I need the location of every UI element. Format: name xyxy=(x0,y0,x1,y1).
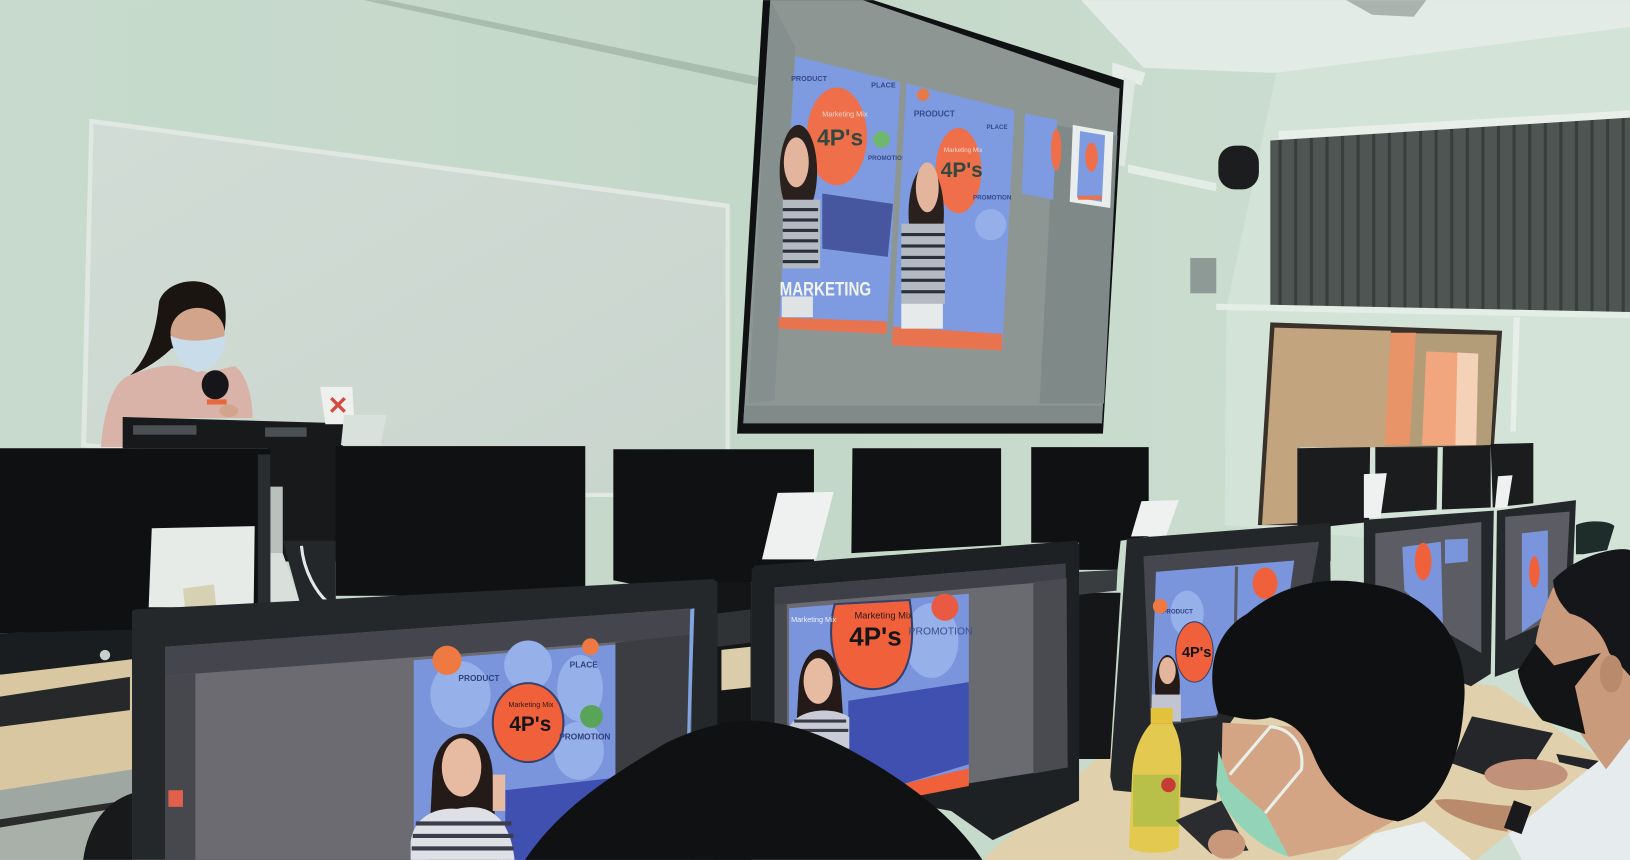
wall pole xyxy=(1510,317,1520,432)
student shirt xyxy=(1337,821,1472,860)
keyboard behind monitor xyxy=(1079,570,1118,595)
upper wall rail xyxy=(364,0,759,85)
projected poster one: PLACE xyxy=(871,80,896,89)
shirt xyxy=(1508,728,1630,860)
dark chair back xyxy=(1576,521,1614,554)
back row monitor three xyxy=(613,449,814,608)
back row monitor five xyxy=(1031,447,1149,570)
computer stand and cables xyxy=(268,487,336,601)
right wall panel xyxy=(1225,27,1630,562)
paper note three xyxy=(762,492,834,559)
back row monitor four xyxy=(851,448,1001,553)
second right monitor xyxy=(1364,511,1494,686)
artboard: PLACE xyxy=(570,660,598,670)
tool strip xyxy=(165,674,195,860)
projected poster one xyxy=(779,56,907,334)
projected poster two xyxy=(892,83,1015,350)
screen housing xyxy=(1112,63,1146,85)
woman in poster one xyxy=(780,125,820,317)
woman in poster two xyxy=(901,162,945,329)
projected poster one: MARKETING xyxy=(780,278,871,300)
left keyboard xyxy=(0,677,130,727)
arm xyxy=(1435,799,1513,832)
blouse xyxy=(101,366,253,447)
paper note on monitor xyxy=(149,526,255,607)
lower wall rail xyxy=(1128,164,1216,191)
dark gap between monitors xyxy=(1079,593,1121,759)
desk sign with red cross xyxy=(320,387,354,424)
whiteboard xyxy=(81,119,730,497)
artboard: PROMOTION xyxy=(559,731,610,741)
middle desk strip xyxy=(721,647,751,690)
artboard xyxy=(789,594,973,796)
projected poster one: 4P's xyxy=(817,125,863,151)
student neck and face xyxy=(1221,723,1393,857)
woman on artboard xyxy=(411,734,515,860)
microphone xyxy=(202,370,238,417)
wall speaker xyxy=(1218,146,1259,189)
far right monitors xyxy=(1297,443,1533,562)
front monitor centre xyxy=(752,541,1079,840)
HP logo xyxy=(100,650,110,660)
third right monitor xyxy=(1495,500,1576,677)
front right desk xyxy=(982,665,1601,860)
artboard: Marketing Mix xyxy=(791,615,837,624)
artboard: 4P's xyxy=(849,622,902,652)
student face mask xyxy=(1216,751,1289,857)
hair xyxy=(1553,549,1630,676)
instructor xyxy=(101,281,253,447)
left desk xyxy=(0,659,132,860)
projected thumbnails xyxy=(1022,113,1113,208)
artboard: PRODUCT xyxy=(458,673,499,683)
artboard: Marketing Mix xyxy=(855,611,913,621)
projected poster two: PLACE xyxy=(987,124,1008,131)
mask strap xyxy=(1230,727,1302,813)
middle keyboard xyxy=(717,609,751,647)
instructor monitor xyxy=(123,417,343,562)
front monitor left xyxy=(132,579,717,860)
front keyboard xyxy=(1176,801,1248,854)
ear xyxy=(1600,655,1623,692)
software toolbar xyxy=(748,0,795,403)
woman on artboard xyxy=(790,649,849,749)
artboard xyxy=(411,638,615,860)
hair xyxy=(130,281,226,375)
taskbar xyxy=(743,406,1103,423)
back row monitor two xyxy=(336,446,585,596)
watch xyxy=(1504,800,1531,834)
projected poster one: Marketing Mix xyxy=(822,110,868,119)
drink bottle xyxy=(1129,708,1181,853)
artboard: Marketing Mix xyxy=(508,700,554,709)
student at far right xyxy=(1435,549,1630,860)
face mask xyxy=(170,336,226,372)
front monitor right: 4P's xyxy=(1182,645,1211,661)
chair xyxy=(83,793,132,860)
projected poster two: PRODUCT xyxy=(914,109,955,119)
student with teal mask xyxy=(1208,581,1472,860)
right panel of software xyxy=(1040,125,1118,403)
artboard: 4P's xyxy=(509,713,551,736)
artboard: PROMOTION xyxy=(909,626,973,637)
projection screen xyxy=(737,0,1146,434)
paper note five xyxy=(1131,500,1179,537)
wall switch box xyxy=(1190,258,1216,293)
right keyboard xyxy=(1451,716,1553,787)
paper note xyxy=(341,415,387,445)
foreground head xyxy=(525,721,982,860)
ceiling xyxy=(1081,0,1630,73)
student hand xyxy=(1208,830,1245,859)
face xyxy=(170,308,225,358)
projected poster one: PRODUCT xyxy=(791,74,828,83)
student hair xyxy=(1212,581,1465,821)
front monitor right: PRODUCT xyxy=(1162,608,1193,615)
front monitor right xyxy=(1110,523,1331,801)
desk sign with red cross: ✕ xyxy=(327,392,348,420)
gap behind middle monitors xyxy=(715,582,752,860)
hand on keyboard xyxy=(1484,759,1568,790)
door xyxy=(1258,322,1502,525)
projected poster two: Marketing Mix xyxy=(944,147,983,154)
phone xyxy=(1556,754,1600,771)
projected poster two: PROMOTION xyxy=(973,195,1012,202)
projected poster two: 4P's xyxy=(941,159,983,182)
back row monitor one xyxy=(0,448,270,675)
projected poster one: PROMOTION xyxy=(868,155,907,162)
layers panel xyxy=(615,634,693,780)
ceiling light xyxy=(1346,0,1426,17)
black face mask xyxy=(1518,644,1601,734)
face xyxy=(1535,587,1630,769)
wall trim xyxy=(1216,304,1630,318)
software top bar xyxy=(165,608,693,676)
window blinds xyxy=(1270,110,1630,314)
